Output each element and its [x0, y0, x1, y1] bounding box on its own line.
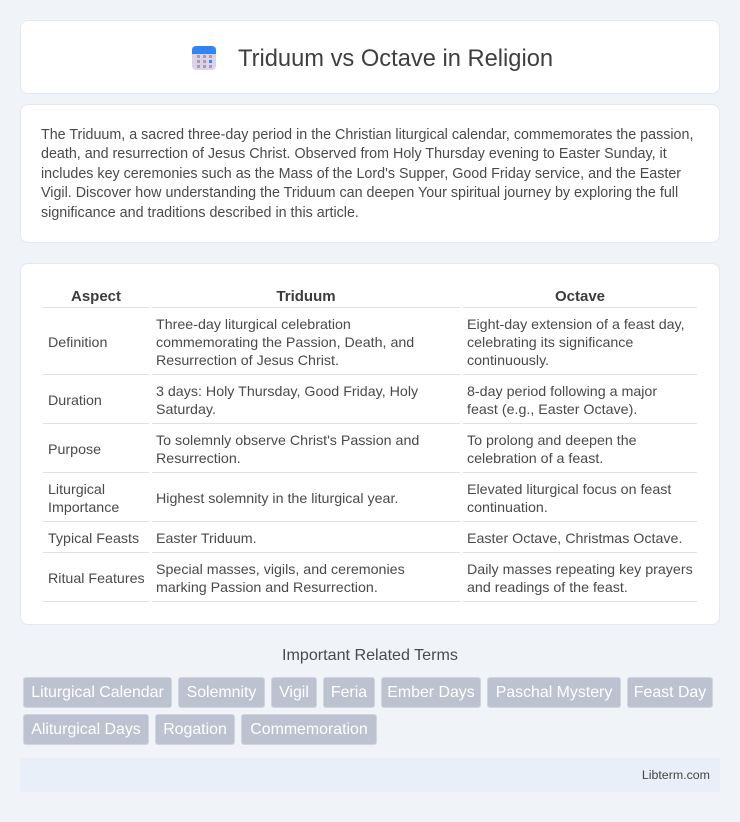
table header: Triduum [276, 288, 336, 305]
row: definition: Resurrection of Jesus Christ. [156, 353, 339, 369]
row: definition: continuously. [467, 353, 549, 369]
row: liturgical importance: Elevated liturgical focus on feast [467, 482, 671, 498]
header card [20, 20, 720, 94]
row: definition: Definition [48, 335, 107, 351]
title: Triduum vs Octave in Religion [238, 46, 553, 72]
row: liturgical importance [48, 482, 672, 516]
intro text: significance and traditions described in this article. [41, 205, 359, 221]
icon: calendar [192, 46, 216, 70]
related terms tags: Rogation [163, 721, 227, 738]
intro text: includes key ceremonies such as the Mass of the Lord's Supper, Good Friday service, and the Easter [41, 166, 681, 182]
row: definition: commemorating the Passion, Death, and [156, 335, 414, 351]
row: definition: Three-day liturgical celebration [156, 317, 351, 333]
row: ritual features: Special masses, vigils, and ceremonies [156, 562, 405, 578]
related terms tags: Solemnity [187, 684, 256, 701]
row: purpose: Purpose [48, 442, 101, 458]
row: purpose [48, 433, 637, 467]
related terms tags: Aliturgical Days [31, 721, 141, 738]
related terms tags: Paschal Mystery [496, 684, 612, 701]
row: liturgical importance: Liturgical [48, 482, 105, 498]
row: purpose: To prolong and deepen the [467, 433, 637, 449]
related terms heading: Important Related Terms [282, 646, 458, 664]
row: typical feasts: Easter Octave, Christmas Octave. [467, 531, 682, 547]
related terms tags: Liturgical Calendar [31, 684, 164, 701]
row: typical feasts: Typical Feasts [48, 531, 139, 547]
row: ritual features: Daily masses repeating key prayers [467, 562, 693, 578]
intro text [41, 127, 693, 221]
row: duration: 8-day period following a major [467, 384, 657, 400]
row: duration [48, 384, 657, 418]
row: duration: Duration [48, 393, 102, 409]
related terms tags: Feast Day [634, 684, 706, 701]
intro text: death, and resurrection of Jesus Christ. Observed from Holy Thursday evening to Easter Sunday, it [41, 146, 667, 162]
row: purpose: Resurrection. [156, 451, 241, 467]
row: purpose: celebration of a feast. [467, 451, 603, 467]
comparison table panel [20, 263, 720, 625]
row: duration: 3 days: Holy Thursday, Good Friday, Holy [156, 384, 418, 400]
related terms tags: Feria [331, 684, 367, 701]
footer credit: Libterm.com [642, 768, 710, 782]
row: definition: celebrating its significance [467, 335, 633, 351]
row: typical feasts [48, 531, 682, 547]
intro text: Vigil. Discover how understanding the Triduum can deepen Your spiritual journey by exploring the full [41, 185, 678, 201]
row: purpose: To solemnly observe Christ's Passion and [156, 433, 419, 449]
table header: Aspect [71, 288, 121, 305]
row: definition [48, 317, 685, 369]
intro text: The Triduum, a sacred three-day period in the Christian liturgical calendar, commemorates the passion, [41, 127, 693, 143]
row: liturgical importance: Highest solemnity in the liturgical year. [156, 491, 398, 507]
table header [71, 288, 605, 305]
related terms tags: Vigil [279, 684, 309, 701]
row: ritual features: Ritual Features [48, 571, 145, 587]
related terms tags: Ember Days [387, 684, 475, 701]
table header: Octave [555, 288, 605, 305]
row: liturgical importance: continuation. [467, 500, 548, 516]
row: duration: feast (e.g., Easter Octave). [467, 402, 637, 418]
row: ritual features [48, 562, 693, 596]
row: typical feasts: Easter Triduum. [156, 531, 257, 547]
related terms tags [23, 677, 713, 745]
intro panel [20, 104, 720, 243]
footer [20, 758, 720, 792]
row: definition: Eight-day extension of a feast day, [467, 317, 685, 333]
row: duration: Saturday. [156, 402, 216, 418]
comparison table [43, 288, 697, 602]
row: ritual features: marking Passion and Resurrection. [156, 580, 378, 596]
row: liturgical importance: Importance [48, 500, 119, 516]
related terms tags: Commemoration [250, 721, 368, 738]
row: ritual features: and readings of the feast. [467, 580, 628, 596]
